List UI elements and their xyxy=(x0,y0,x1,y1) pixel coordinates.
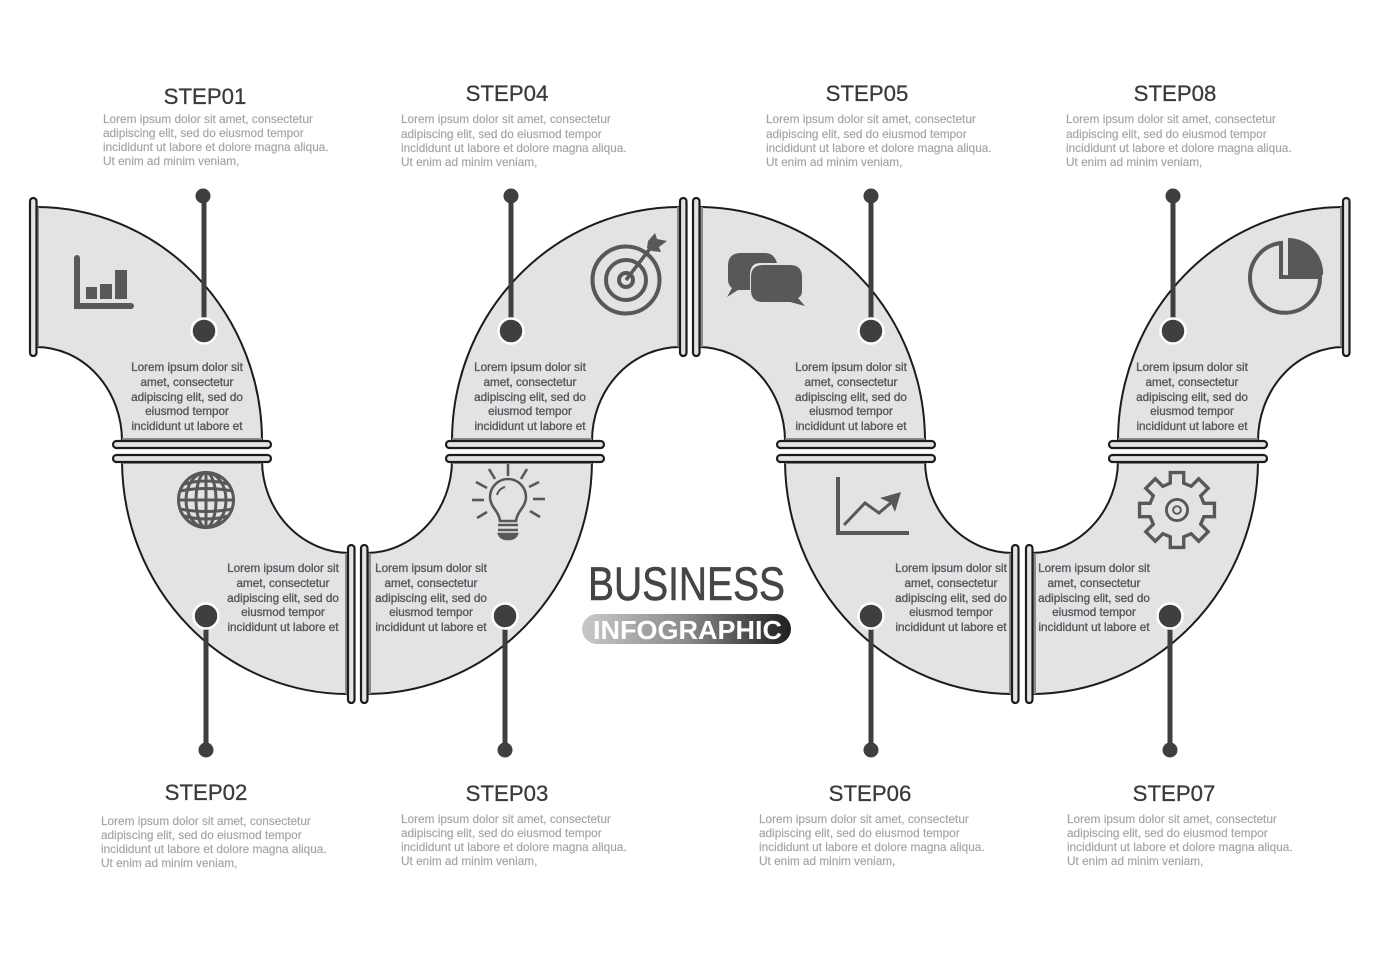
step 02 block: STEP02 xyxy=(165,780,247,805)
step 02 block: Lorem ipsum dolor sit amet, consectetur xyxy=(101,814,311,828)
pipe text 7: incididunt ut labore et xyxy=(1038,621,1150,634)
step 03 block: Lorem ipsum dolor sit amet, consectetur xyxy=(401,812,611,826)
step 02 block: Ut enim ad minim veniam, xyxy=(101,856,237,870)
pipe text 1: Lorem ipsum dolor sit xyxy=(131,361,244,374)
step 01 block: Lorem ipsum dolor sit amet, consectetur xyxy=(103,112,313,126)
pipe text 1: amet, consectetur xyxy=(141,376,234,389)
pipe text 6: eiusmod tempor xyxy=(909,606,993,619)
step 01 block: Ut enim ad minim veniam, xyxy=(103,154,239,168)
step 05 block: adipiscing elit, sed do eiusmod tempor xyxy=(766,127,967,141)
pipe text 4: incididunt ut labore et xyxy=(474,420,586,433)
pipe text 5: amet, consectetur xyxy=(805,376,898,389)
step 03 block: adipiscing elit, sed do eiusmod tempor xyxy=(401,826,602,840)
step 05 block: Ut enim ad minim veniam, xyxy=(766,155,902,169)
step 05 block: STEP05 xyxy=(826,81,908,106)
step 04 block xyxy=(401,81,627,169)
connector step 03 xyxy=(492,604,518,758)
pipe segment 6 xyxy=(777,455,1018,703)
step 07 block: Ut enim ad minim veniam, xyxy=(1067,854,1203,868)
step 04 block: Ut enim ad minim veniam, xyxy=(401,155,537,169)
pipe text 2: Lorem ipsum dolor sit xyxy=(227,562,340,575)
step 03 block: STEP03 xyxy=(466,781,548,806)
icon: chat bubbles xyxy=(727,253,805,306)
pipe text 3: incididunt ut labore et xyxy=(375,621,487,634)
pipe segment 7 xyxy=(1026,455,1267,703)
pipe text 8: Lorem ipsum dolor sit xyxy=(1136,361,1249,374)
pipe text 8: adipiscing elit, sed do xyxy=(1136,391,1248,404)
pipe text 3: Lorem ipsum dolor sit xyxy=(375,562,488,575)
step 05 block: Lorem ipsum dolor sit amet, consectetur xyxy=(766,112,976,126)
step 01 block xyxy=(103,84,329,168)
pipe text 5: Lorem ipsum dolor sit xyxy=(795,361,908,374)
connector step 01 xyxy=(192,188,216,344)
pipe text 4: eiusmod tempor xyxy=(488,405,572,418)
step 02 block: adipiscing elit, sed do eiusmod tempor xyxy=(101,828,302,842)
pipe text 8: amet, consectetur xyxy=(1146,376,1239,389)
step 06 block xyxy=(759,781,985,868)
step 08 block xyxy=(1066,81,1292,169)
connector step 08 xyxy=(1160,188,1186,344)
pipe text 4: amet, consectetur xyxy=(484,376,577,389)
title: BUSINESS xyxy=(588,557,785,610)
connector step 02 xyxy=(194,604,218,758)
step 08 block: incididunt ut labore et dolore magna aliqua. xyxy=(1066,141,1292,155)
connector step 04 xyxy=(498,188,524,344)
step 08 block: Ut enim ad minim veniam, xyxy=(1066,155,1202,169)
pipe text 8: incididunt ut labore et xyxy=(1136,420,1248,433)
icon: pie chart xyxy=(1250,238,1323,313)
step 03 block: incididunt ut labore et dolore magna aliqua. xyxy=(401,840,627,854)
pipe text 2: incididunt ut labore et xyxy=(227,621,339,634)
pipe text 7: amet, consectetur xyxy=(1048,577,1141,590)
step 07 block: incididunt ut labore et dolore magna aliqua. xyxy=(1067,840,1293,854)
step 04 block: incididunt ut labore et dolore magna aliqua. xyxy=(401,141,627,155)
connector step 05 xyxy=(858,188,884,344)
icon: globe xyxy=(178,472,234,528)
step 02 block xyxy=(101,780,327,870)
step 07 block: Lorem ipsum dolor sit amet, consectetur xyxy=(1067,812,1277,826)
pipe text 7: Lorem ipsum dolor sit xyxy=(1038,562,1151,575)
step 03 block xyxy=(401,781,627,868)
pipe text 3: adipiscing elit, sed do xyxy=(375,592,487,605)
pipe segment 2 xyxy=(113,455,354,703)
connector step 06 xyxy=(858,604,884,758)
step 07 block: adipiscing elit, sed do eiusmod tempor xyxy=(1067,826,1268,840)
pipe text 6: adipiscing elit, sed do xyxy=(895,592,1007,605)
pipe text 6: Lorem ipsum dolor sit xyxy=(895,562,1008,575)
pipe text 4: Lorem ipsum dolor sit xyxy=(474,361,587,374)
icon: growth chart xyxy=(836,477,909,535)
step 02 block: incididunt ut labore et dolore magna aliqua. xyxy=(101,842,327,856)
pipe segment 4 xyxy=(446,198,686,448)
step 06 block: incididunt ut labore et dolore magna aliqua. xyxy=(759,840,985,854)
pipe segment 1 xyxy=(30,198,271,448)
icon: target with arrow xyxy=(592,233,667,314)
pipe segment 5 xyxy=(693,198,935,448)
pipe text 3: eiusmod tempor xyxy=(389,606,473,619)
step 08 block: Lorem ipsum dolor sit amet, consectetur xyxy=(1066,112,1276,126)
step 07 block xyxy=(1067,781,1293,868)
step 08 block: adipiscing elit, sed do eiusmod tempor xyxy=(1066,127,1267,141)
icon: gear xyxy=(1140,473,1214,547)
pipe text 5: eiusmod tempor xyxy=(809,405,893,418)
pipe text 1: incididunt ut labore et xyxy=(131,420,243,433)
pipe segment 3 xyxy=(361,455,604,703)
pipe text 6: incididunt ut labore et xyxy=(895,621,1007,634)
step 04 block: Lorem ipsum dolor sit amet, consectetur xyxy=(401,112,611,126)
step 06 block: Ut enim ad minim veniam, xyxy=(759,854,895,868)
pipe text 2: adipiscing elit, sed do xyxy=(227,592,339,605)
step 08 block: STEP08 xyxy=(1134,81,1216,106)
step 05 block: incididunt ut labore et dolore magna aliqua. xyxy=(766,141,992,155)
pipe text 5: adipiscing elit, sed do xyxy=(795,391,907,404)
pipe text 1: adipiscing elit, sed do xyxy=(131,391,243,404)
connector step 07 xyxy=(1158,604,1182,758)
step 01 block: STEP01 xyxy=(164,84,246,109)
step 07 block: STEP07 xyxy=(1133,781,1215,806)
pipe segment 8 xyxy=(1109,198,1350,448)
step 04 block: STEP04 xyxy=(466,81,548,106)
pipe text 8: eiusmod tempor xyxy=(1150,405,1234,418)
step 06 block: Lorem ipsum dolor sit amet, consectetur xyxy=(759,812,969,826)
title: INFOGRAPHIC xyxy=(593,615,782,645)
icon: light bulb xyxy=(472,464,545,539)
pipe text 7: adipiscing elit, sed do xyxy=(1038,592,1150,605)
pipe text 6: amet, consectetur xyxy=(905,577,998,590)
pipe text 2: amet, consectetur xyxy=(237,577,330,590)
pipe text 7: eiusmod tempor xyxy=(1052,606,1136,619)
pipe text 1: eiusmod tempor xyxy=(145,405,229,418)
step 01 block: adipiscing elit, sed do eiusmod tempor xyxy=(103,126,304,140)
pipe text 3: amet, consectetur xyxy=(385,577,478,590)
pipe text 4: adipiscing elit, sed do xyxy=(474,391,586,404)
pipe text 2: eiusmod tempor xyxy=(241,606,325,619)
step 06 block: adipiscing elit, sed do eiusmod tempor xyxy=(759,826,960,840)
step 01 block: incididunt ut labore et dolore magna aliqua. xyxy=(103,140,329,154)
step 06 block: STEP06 xyxy=(829,781,911,806)
step 04 block: adipiscing elit, sed do eiusmod tempor xyxy=(401,127,602,141)
icon: bar chart xyxy=(74,255,134,309)
title xyxy=(582,557,791,645)
step 03 block: Ut enim ad minim veniam, xyxy=(401,854,537,868)
step 05 block xyxy=(766,81,992,169)
pipe text 5: incididunt ut labore et xyxy=(795,420,907,433)
